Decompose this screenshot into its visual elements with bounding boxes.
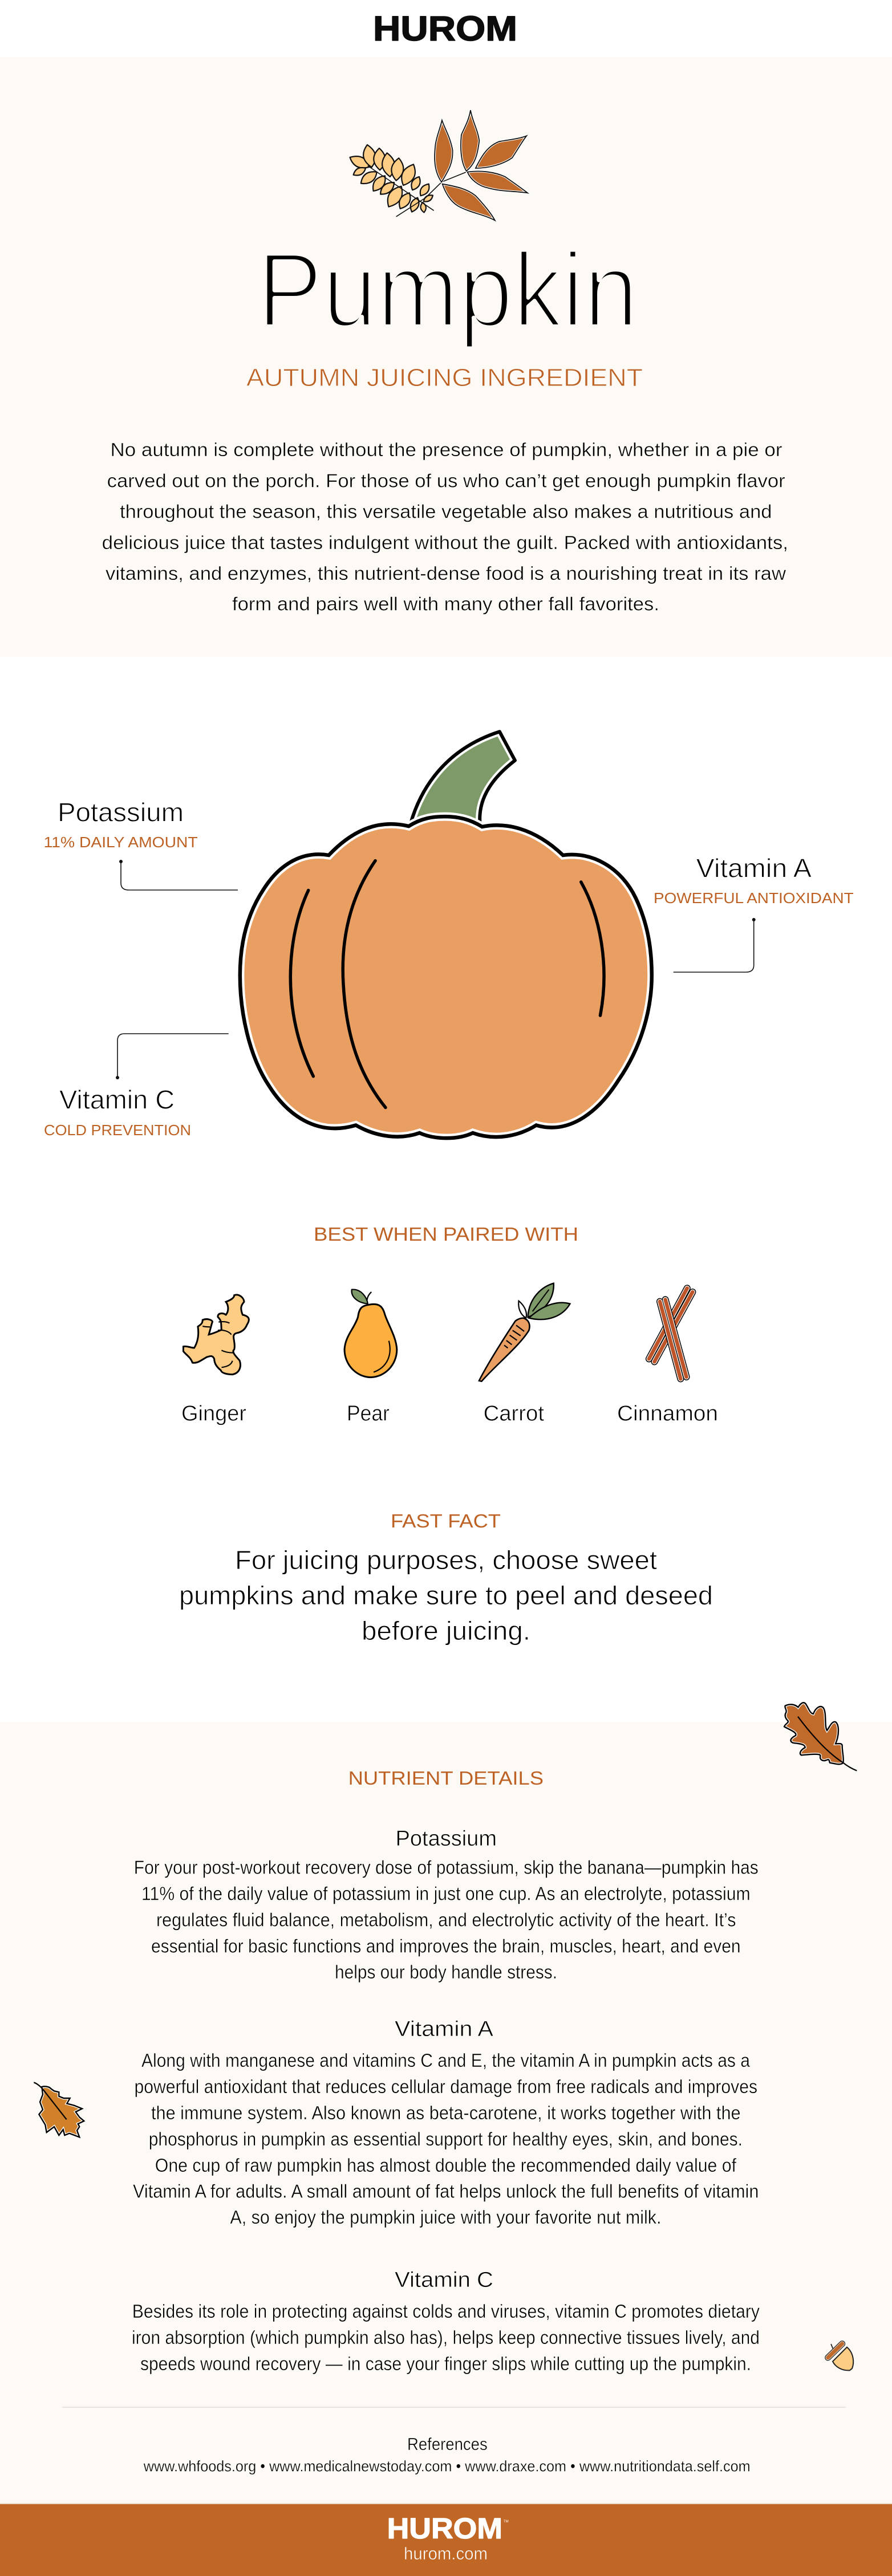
label: pear: Pear: [347, 1402, 390, 1426]
heading: nutrient details: NUTRIENT DETAILS: [348, 1768, 544, 1789]
detail: vitamin C heading: Vitamin C: [395, 2268, 493, 2292]
callout: vitamin A: [654, 853, 854, 972]
subtitle: AUTUMN JUICING INGREDIENT: [246, 364, 643, 392]
label: carrot: Carrot: [484, 1402, 544, 1426]
icon: cinnamon: [649, 1288, 692, 1379]
label: cinnamon: Cinnamon: [617, 1402, 718, 1426]
intro paragraph: No autumn is complete without the presence of pumpkin, whether in a pie or: [111, 439, 782, 460]
brand logo: header: HUROM: [373, 9, 517, 48]
detail: potassium text: 11% of the daily value of potassium in just one cup. As an electrolyte, potassium: [141, 1883, 751, 1904]
callout: vitamin C: COLD PREVENTION: [44, 1122, 191, 1139]
callout: vitamin C: [44, 1034, 229, 1139]
pumpkin stem: [410, 732, 515, 825]
detail: vitamin A text: [133, 2050, 759, 2228]
detail: potassium text: helps our body handle stress.: [335, 1961, 557, 1982]
detail: vitamin A text: Vitamin A for adults. A small amount of fat helps unlock the full benefits of vitamin: [133, 2180, 759, 2202]
detail: potassium text: [134, 1856, 759, 1982]
intro paragraph: throughout the season, this versatile vegetable also makes a nutritious and: [120, 501, 772, 522]
pairing: cinnamon: [617, 1288, 718, 1426]
icon: acorn: [828, 2344, 853, 2370]
heading: best when paired with: BEST WHEN PAIRED WITH: [314, 1224, 578, 1245]
detail: vitamin C text: Besides its role in protecting against colds and viruses, vitamin C promotes dietary: [132, 2301, 760, 2322]
pairing: pear: [344, 1290, 397, 1426]
icon: pear: [344, 1290, 397, 1378]
icon: ginger: [183, 1295, 249, 1375]
icon: autumn leaves: [350, 110, 528, 221]
pumpkin ribs: [290, 861, 604, 1107]
detail: vitamin A text: One cup of raw pumpkin has almost double the recommended daily value of: [155, 2155, 737, 2176]
intro paragraph: delicious juice that tastes indulgent without the guilt. Packed with antioxidants,: [102, 532, 788, 553]
detail: potassium text: For your post-workout recovery dose of potassium, skip the banana—pumpkin has: [134, 1856, 759, 1878]
detail: vitamin A text: phosphorus in pumpkin as essential support for healthy eyes, skin, and bones.: [149, 2128, 743, 2150]
pairing: carrot: [479, 1283, 570, 1426]
footer band: [0, 2503, 892, 2576]
detail: vitamin A heading: Vitamin A: [395, 2017, 494, 2041]
fast fact text: pumpkins and make sure to peel and deseed: [179, 1580, 713, 1610]
heading: fast fact: FAST FACT: [391, 1510, 501, 1531]
detail: vitamin A text: A, so enjoy the pumpkin juice with your favorite nut milk.: [230, 2207, 661, 2228]
pumpkin body: [240, 816, 652, 1138]
intro paragraph: form and pairs well with many other fall favorites.: [232, 593, 659, 615]
callout: vitamin A: Vitamin A: [696, 853, 812, 883]
detail: vitamin A text: the immune system. Also known as beta-carotene, it works together with the: [151, 2102, 741, 2123]
references: References: [407, 2434, 488, 2454]
panel: introduction: [0, 57, 892, 657]
detail: vitamin C text: iron absorption (which pumpkin also has), helps keep connective tissues lively, and: [132, 2327, 760, 2348]
callout: potassium: 11% DAILY AMOUNT: [44, 834, 198, 851]
callout: vitamin A: POWERFUL ANTIOXIDANT: [654, 889, 854, 907]
label: ginger: Ginger: [181, 1402, 246, 1426]
intro paragraph: vitamins, and enzymes, this nutrient-dense food is a nourishing treat in its raw: [106, 563, 786, 584]
panel: nutrient details: [0, 1722, 892, 2504]
brand logo: footer: HUROM: [387, 2512, 502, 2545]
detail: potassium text: essential for basic functions and improves the brain, muscles, heart, and even: [151, 1935, 741, 1956]
fast fact text: [179, 1545, 713, 1645]
icon: oak leaf top right: [784, 1703, 857, 1771]
icon: jagged leaf left: [34, 2082, 84, 2137]
title: Pumpkin: [257, 231, 638, 350]
icon: carrot: [479, 1283, 570, 1382]
intro paragraph: [102, 439, 788, 615]
detail: potassium text: regulates fluid balance, metabolism, and electrolytic activity of the heart. It’s: [156, 1909, 736, 1931]
detail: vitamin A text: Along with manganese and vitamins C and E, the vitamin A in pumpkin acts as a: [141, 2050, 751, 2071]
detail: vitamin C text: speeds wound recovery — in case your finger slips while cutting up the pumpkin.: [140, 2353, 751, 2374]
callout: potassium: Potassium: [58, 797, 184, 827]
references: [143, 2434, 751, 2475]
callout: potassium: [44, 797, 238, 890]
detail: potassium heading: Potassium: [396, 1827, 497, 1851]
intro paragraph: carved out on the porch. For those of us who can’t get enough pumpkin flavor: [107, 470, 785, 491]
callout: vitamin C: Vitamin C: [59, 1085, 175, 1115]
references: www.whfoods.org • www.medicalnewstoday.com • www.draxe.com • www.nutritiondata.self.com: [143, 2457, 751, 2475]
footer url: hurom.com: [404, 2544, 488, 2563]
detail: vitamin A text: powerful antioxidant that reduces cellular damage from free radicals and improves: [135, 2076, 757, 2097]
fast fact text: before juicing.: [362, 1616, 530, 1645]
detail: vitamin C text: [132, 2301, 760, 2374]
illustration: pumpkin: [240, 732, 652, 1138]
fast fact text: For juicing purposes, choose sweet: [235, 1545, 657, 1575]
brand logo: footer: TM: [504, 2520, 509, 2524]
pairing: ginger: [181, 1295, 249, 1426]
